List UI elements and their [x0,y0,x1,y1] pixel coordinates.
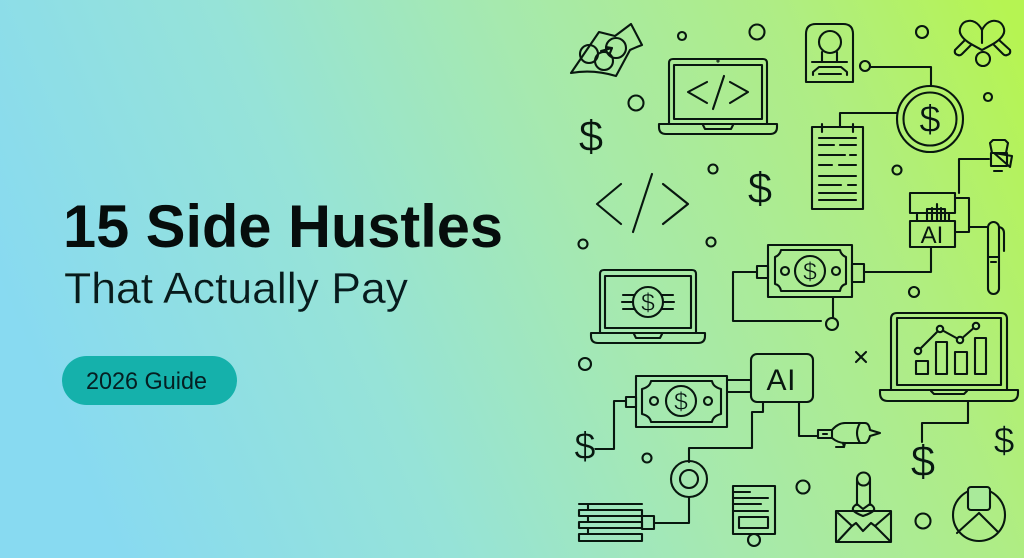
icon: laptop with code [659,59,777,134]
icon: banknote with dollar coin: $ [803,258,817,286]
icon: large dollar coin [897,86,963,152]
connector: tool to AI chip [959,159,989,193]
icon: banknote with dollar coin [757,245,864,297]
icon: AI chip: AI [921,222,943,249]
icon: drill tool [818,423,880,447]
icon: lower banknote [626,376,751,427]
icon: server stack [579,504,654,541]
connector: laptop to dollar sign [922,401,968,442]
icon: pen [969,222,1004,294]
badge: 2026 Guide [62,356,237,405]
icon: dollar sign: $ [911,437,935,486]
icon: AI box [751,354,813,402]
connector: AI box to drill [799,402,818,436]
icon: small pointer tool [990,140,1012,171]
connector: AI box to ring [689,402,763,462]
subtitle: That Actually Pay [64,264,408,313]
connector: badge to coin [860,61,931,85]
icon: laptop with coin: $ [641,289,655,317]
badge: 2026 Guide: 2026 Guide [86,368,207,395]
icon: AI chip [910,193,969,249]
icon: envelope with arrow [836,473,891,542]
icon: dollar sign: $ [748,164,772,213]
icon: ring node [671,461,707,497]
icon: dollar sign: $ [574,426,596,468]
icon: laptop with chart [880,313,1018,401]
icon: ID badge [806,24,853,82]
connector: ring to server [654,497,689,523]
icon: heart with hands [955,21,1010,66]
icon: dollar sign: $ [994,420,1014,461]
icon: AI box: AI [766,364,796,397]
connector: coin to clipboard [840,113,897,127]
icon: clipboard document [812,124,863,209]
icon: large dollar coin: $ [919,99,941,141]
icon: code brackets [597,174,688,232]
icon: laptop with coin [591,270,705,343]
icon: document [733,486,775,546]
icon: lower banknote: $ [674,388,688,416]
decorative circles [578,24,992,528]
connector: banknote circuit lines [733,247,931,330]
title: 15 Side Hustles [63,193,503,260]
icon: pie chart [953,487,1005,541]
connector: banknote to dollar sign [593,401,626,449]
icon: banknote with coins [571,24,642,76]
icon: dollar sign: $ [579,112,603,161]
